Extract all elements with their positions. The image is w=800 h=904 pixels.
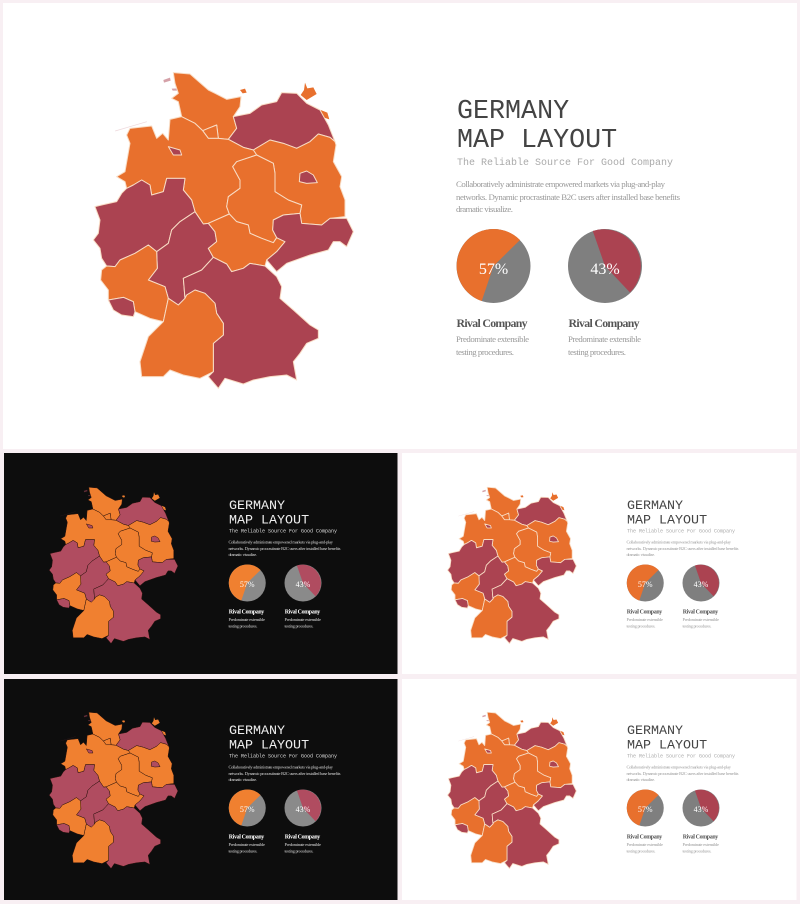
text block: dark bottom: MAP LAYOUT [229, 738, 309, 754]
text block: light bottom: testing procedures. [626, 848, 656, 854]
map: dark bottom [49, 712, 178, 869]
text block: dark top: networks. Dynamic procrastinate B2C users after installed base benefits [228, 546, 341, 551]
text block: dark top: Rival Company [229, 610, 264, 616]
text block: dark bottom: 57% [240, 805, 255, 814]
text block: dark top [228, 499, 341, 628]
text block: dark top: Rival Company [285, 610, 320, 616]
text block: dark bottom: The Reliable Source For Good Company [229, 754, 337, 760]
panel: light slide bottom [402, 679, 796, 900]
text block: dark top: testing procedures. [228, 624, 258, 628]
text block: dark bottom: 43% [296, 805, 311, 814]
company label right: Rival Company [568, 316, 640, 330]
title: GERMANY [457, 97, 569, 127]
text block: light top: Predominate extensible [626, 617, 663, 622]
text block: light bottom: Predominate extensible [626, 842, 663, 847]
description right: testing procedures. [568, 347, 626, 357]
pie chart: 57%: 57% [479, 261, 508, 278]
text block: light top: Rival Company [627, 610, 662, 616]
text block: dark bottom: Predominate extensible [284, 842, 321, 847]
text block: light bottom: Predominate extensible [682, 842, 719, 847]
text block: dark bottom: testing procedures. [228, 848, 258, 854]
text block: light top: testing procedures. [626, 624, 656, 628]
text block: light top [626, 499, 739, 628]
text block: dark top: dramatic visualize. [228, 552, 257, 557]
text block: dark top: The Reliable Source For Good Company [229, 528, 337, 534]
text block: light bottom: MAP LAYOUT [627, 738, 707, 754]
text block: dark top: GERMANY [229, 499, 285, 514]
text block: light bottom: testing procedures. [682, 848, 712, 854]
text block: light bottom: networks. Dynamic procrastinate B2C users after installed base benefits [626, 771, 739, 776]
map: dark top [49, 487, 178, 644]
text block: light top: Collaboratively administrate empowered markets via plug-and-play [626, 540, 732, 544]
text block: light top: Predominate extensible [682, 617, 719, 622]
text block: light bottom: Rival Company [683, 834, 718, 840]
company label left: Rival Company [456, 316, 528, 330]
text block: light top: The Reliable Source For Good Company [627, 528, 735, 534]
text block: dark top: 57% [240, 580, 255, 589]
text block: light bottom [626, 724, 739, 854]
description left: Predominate extensible [456, 334, 529, 344]
text block: dark bottom [228, 724, 341, 854]
text block: light top: networks. Dynamic procrastinate B2C users after installed base benefits [626, 546, 739, 551]
map: light top [448, 487, 576, 644]
text block: light top: GERMANY [627, 499, 683, 514]
text block: light top: testing procedures. [682, 624, 712, 628]
pie chart: 43% [568, 229, 642, 303]
text block: light bottom: dramatic visualize. [626, 777, 655, 782]
map: light bottom [448, 712, 576, 869]
text block: light top: dramatic visualize. [626, 552, 655, 557]
text block: light bottom: GERMANY [627, 724, 683, 739]
text block: dark top: MAP LAYOUT [229, 514, 309, 528]
text block: dark bottom: Predominate extensible [228, 842, 265, 847]
text block: light top: Rival Company [683, 610, 718, 616]
description right: Predominate extensible [568, 334, 641, 344]
text block: dark bottom: Rival Company [285, 834, 320, 840]
text block: light bottom: Rival Company [627, 834, 662, 840]
text block: light top: MAP LAYOUT [627, 514, 707, 528]
text block: dark bottom: networks. Dynamic procrastinate B2C users after installed base benefits [228, 771, 341, 776]
paragraph: dramatic visualize. [456, 204, 513, 214]
map: Germany main [93, 73, 353, 388]
subtitle: The Reliable Source For Good Company [457, 157, 673, 169]
text block: dark top: Predominate extensible [228, 617, 265, 622]
text block: light bottom: 43% [694, 805, 709, 814]
description left: testing procedures. [456, 347, 514, 357]
text block: dark top: 43% [296, 580, 311, 589]
text block: dark top: Collaboratively administrate empowered markets via plug-and-play [228, 540, 334, 544]
pie chart: 57% [456, 229, 530, 303]
panel: dark slide bottom [4, 679, 398, 900]
text block: dark bottom: Rival Company [229, 834, 264, 840]
text block: light top: 57% [638, 580, 653, 589]
text block: dark bottom: Collaboratively administrate empowered markets via plug-and-play [228, 764, 334, 770]
panel: light slide top [402, 453, 796, 674]
text block: light bottom: The Reliable Source For Good Company [627, 754, 735, 760]
text block: light top: 43% [694, 580, 709, 589]
paragraph: Collaboratively administrate empowered markets via plug-and-play [456, 179, 666, 189]
text block: dark bottom: dramatic visualize. [228, 777, 257, 782]
text block: light bottom: 57% [638, 805, 653, 814]
text block: light bottom: Collaboratively administrate empowered markets via plug-and-play [626, 764, 732, 770]
pie chart: 43%: 43% [590, 261, 620, 278]
text block: dark bottom: testing procedures. [284, 848, 314, 854]
text block: dark bottom: GERMANY [229, 724, 285, 739]
title: MAP LAYOUT [457, 126, 617, 156]
panel: main light slide [3, 3, 797, 449]
text block: main slide [456, 97, 681, 357]
text block: dark top: Predominate extensible [284, 617, 321, 622]
text block: dark top: testing procedures. [284, 624, 314, 628]
panel: dark slide top [4, 453, 398, 674]
paragraph: networks. Dynamic procrastinate B2C users after installed base benefits [456, 192, 681, 202]
